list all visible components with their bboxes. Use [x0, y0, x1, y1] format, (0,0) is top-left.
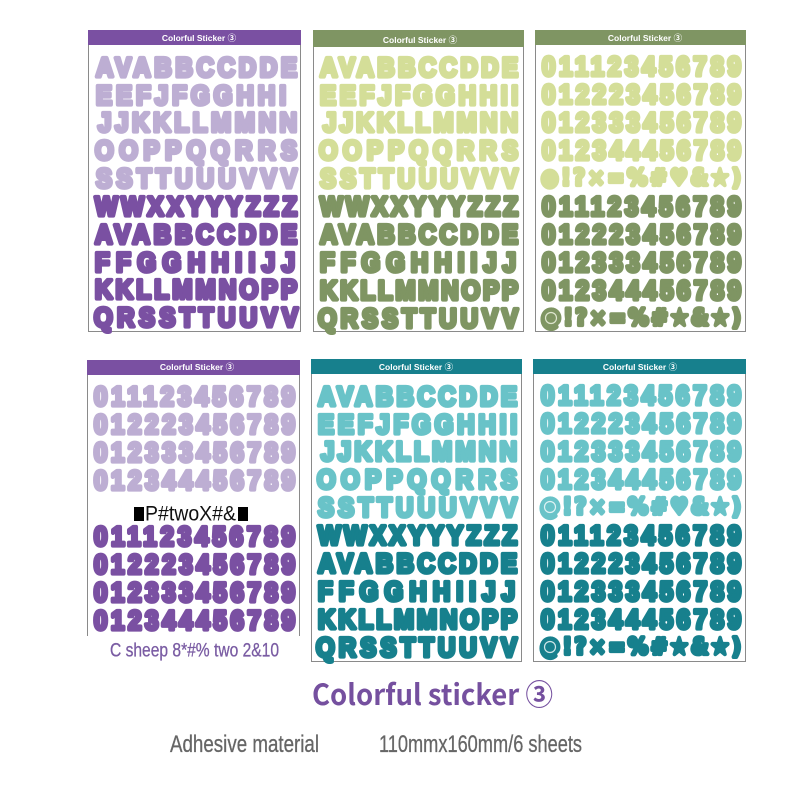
letter rows: KKLLMMNOPP — [320, 276, 518, 306]
number rows: 012344456789 — [94, 466, 295, 496]
number rows: 012333456789 — [542, 108, 741, 138]
number rows: 011123456789 — [94, 382, 295, 412]
sheet header: teal alphabet: Colorful Sticker ③ — [379, 362, 454, 372]
letter rows: WWXXYYYZZZ — [318, 521, 517, 551]
letter rows: EEFJFGGHHII — [320, 81, 518, 111]
sheet header: green numbers: Colorful Sticker ③ — [608, 33, 683, 43]
number rows: 012344456789 — [542, 276, 741, 306]
panel: teal number sheet — [533, 359, 746, 662]
panel: green number sheet — [535, 30, 746, 332]
letter rows: WWXXYYYZZZ — [320, 192, 518, 222]
number rows — [94, 382, 295, 636]
number rows: 012344456789 — [542, 136, 741, 166]
letter rows: JJKKLLMMNN — [98, 108, 297, 138]
number rows: 011123456789 — [94, 522, 295, 552]
number rows: 012333456789 — [94, 578, 295, 608]
letter rows: AVABBCCDDE — [320, 220, 518, 250]
number rows: 012333456789 — [541, 437, 741, 467]
panel: green alphabet sheet — [313, 30, 524, 334]
number rows: 011123456789 — [542, 192, 741, 222]
letter rows: QRSSTTUUVV — [318, 304, 518, 334]
letter rows: WWXXYYYZZZ — [95, 192, 297, 222]
text: size and quantity: 110mmx160mm/6 sheets — [379, 731, 582, 758]
number rows: 012223456789 — [94, 550, 295, 580]
letter rows: SSTTUUUVVV — [320, 164, 518, 194]
sheet header: teal numbers: Colorful Sticker ③ — [603, 362, 678, 372]
letter rows: JJKKLLMMNN — [323, 108, 518, 138]
sheet header: purple numbers: Colorful Sticker ③ — [160, 362, 235, 372]
panel: purple alphabet sheet — [88, 30, 301, 333]
caption: sheep line: C sheep 8*#% two 2&10 — [110, 640, 279, 662]
letter rows: OOPPQQRRS — [319, 136, 518, 166]
letter rows — [316, 382, 517, 663]
number rows: 011123456789 — [541, 521, 741, 551]
number rows: @!?×=%#★&★) — [541, 305, 741, 332]
number rows: 012344456789 — [541, 605, 741, 635]
letter rows: FFGGHHIIJJ — [318, 577, 515, 607]
title: Colorful sticker ③ — [312, 672, 553, 714]
letter rows: AVABBCCDDE — [96, 53, 297, 83]
letter rows: AVABBCCDDE — [318, 382, 517, 412]
number rows — [541, 52, 741, 332]
panel: purple number sheet — [87, 360, 300, 662]
sheet header: green alphabet: Colorful Sticker ③ — [383, 35, 458, 45]
letter rows: KKLLMMNOPP — [318, 605, 517, 635]
letter rows: QRSSTTUUVV — [94, 303, 298, 333]
number rows: ●!?×=%#♥&★) — [541, 165, 741, 192]
letter rows: EEFJFGGHHI — [96, 81, 286, 111]
number rows: 012333456789 — [541, 577, 741, 607]
number rows: 012223456789 — [542, 220, 741, 250]
letter rows — [318, 53, 518, 334]
letter rows: FFGGHHIIJJ — [95, 248, 295, 278]
letter rows: AVABBCCDDE — [320, 53, 518, 83]
text: material: Adhesive material — [170, 731, 319, 758]
number rows: 012333456789 — [542, 248, 741, 278]
letter rows: JJKKLLMMNN — [321, 437, 517, 467]
number rows: 012223456789 — [94, 410, 295, 440]
letter rows: KKLLMMNOPP — [95, 275, 297, 305]
letter rows: FFGGHHIIJJ — [320, 248, 516, 278]
letter rows: EEFJFGGHHII — [318, 410, 517, 440]
number rows: @!?×=%#★&★) — [540, 634, 741, 661]
number rows: 011123456789 — [542, 52, 741, 82]
sheet header: purple alphabet: Colorful Sticker ③ — [162, 33, 237, 43]
letter rows: QRSSTTUUVV — [316, 633, 517, 663]
number rows: @!?×=%#♥&★) — [540, 494, 741, 521]
number rows: 012344456789 — [94, 606, 295, 636]
letter rows — [94, 53, 298, 333]
number rows: 012223456789 — [542, 80, 741, 110]
letter rows: SSTTUUUVVV — [318, 493, 517, 523]
letter rows: AVABBCCDDE — [318, 549, 517, 579]
number rows: 012223456789 — [541, 549, 741, 579]
number rows: 011123456789 — [541, 381, 741, 411]
panel: teal alphabet sheet — [311, 359, 522, 663]
garbled symbol line: P#twoX#& — [145, 502, 236, 526]
letter rows: OOPPQQRRS — [317, 465, 517, 495]
letter rows: OOPPQQRRS — [95, 136, 297, 166]
number rows: 012223456789 — [541, 409, 741, 439]
number rows: 012344456789 — [541, 465, 741, 495]
letter rows: SSTTUUUVVV — [96, 164, 297, 194]
number rows: 012333456789 — [94, 438, 295, 468]
letter rows: AVABBCCDDE — [95, 220, 297, 250]
number rows — [540, 381, 741, 661]
